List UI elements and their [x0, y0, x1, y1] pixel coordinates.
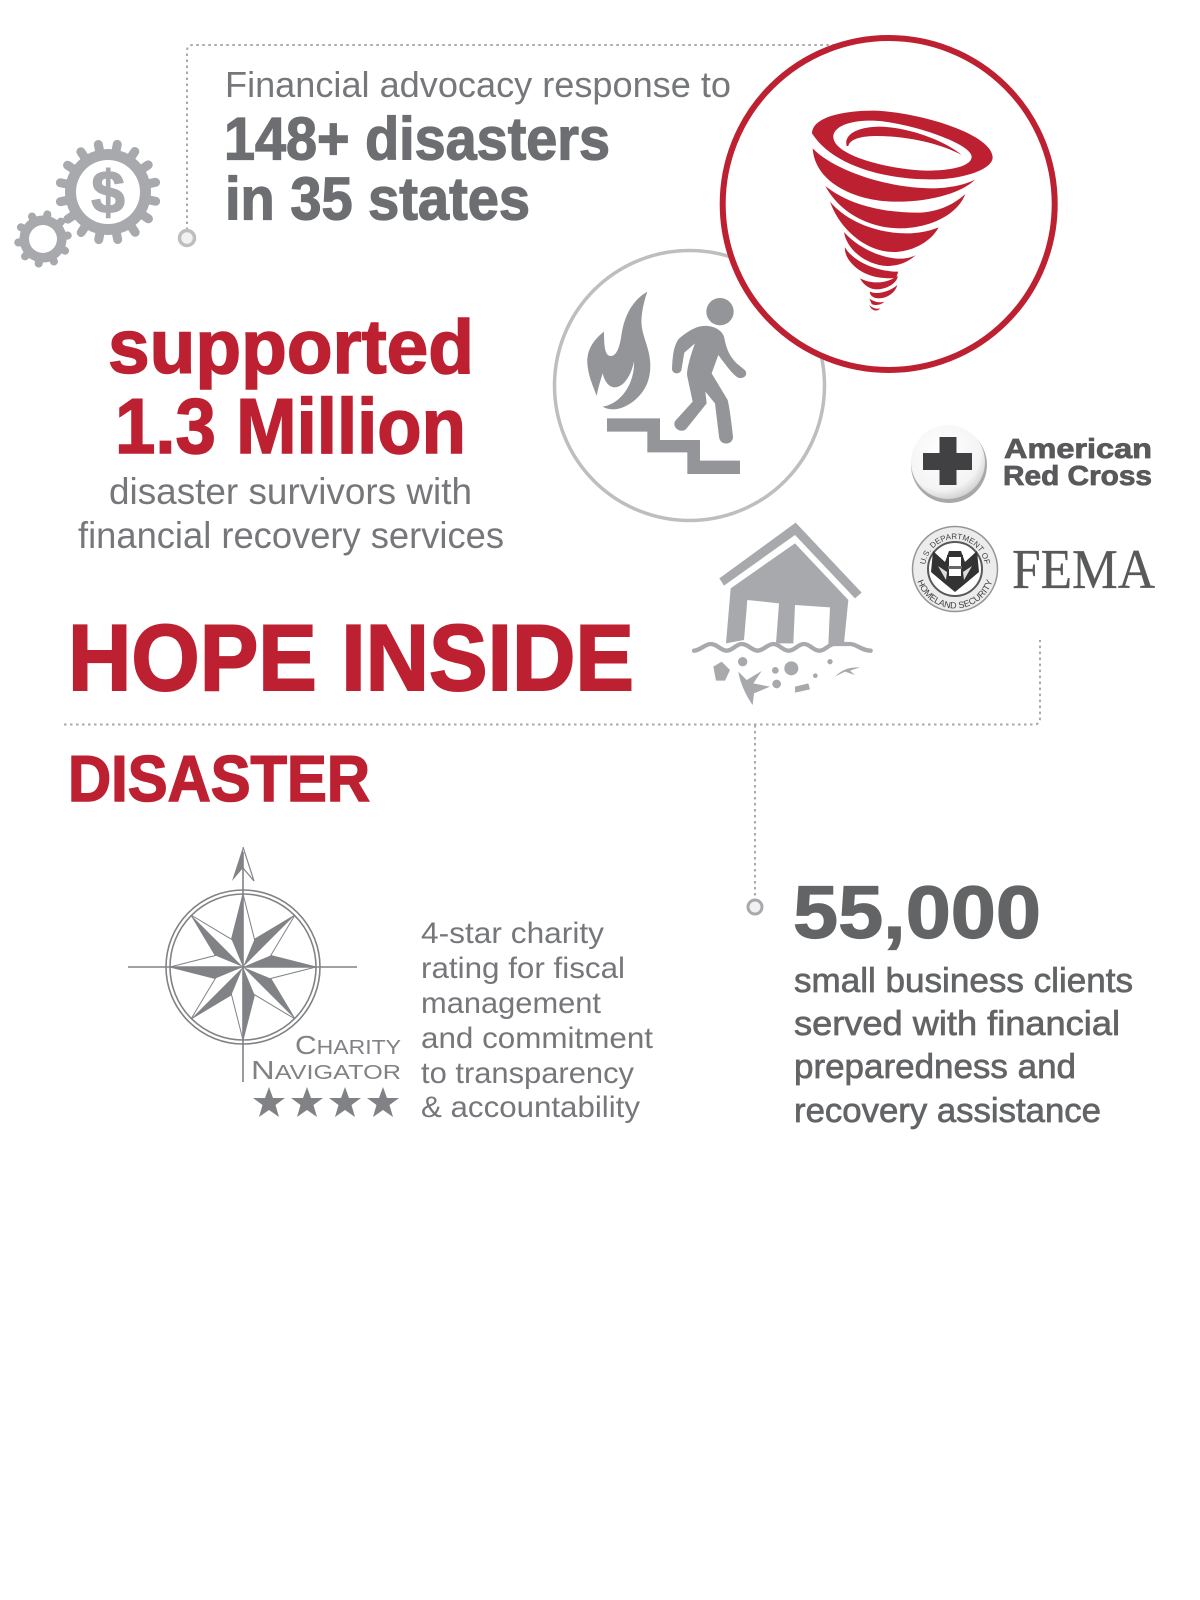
text: disasters stat: in 35 states — [225, 166, 530, 232]
text: charity rating: 4-star charity — [421, 917, 604, 950]
marker: top connector end — [180, 230, 194, 246]
text: small business stat: served with financial — [794, 1005, 1120, 1043]
text: small business stat: recovery assistance — [794, 1092, 1101, 1130]
text: charity rating: to transparency — [421, 1057, 634, 1090]
text: small business stat — [793, 871, 1133, 1130]
logo: FEMA with seal: FEMA — [1012, 539, 1156, 601]
text: survivors stat — [78, 305, 504, 556]
icon: gears with dollar sign — [18, 144, 156, 264]
dotted connector: drop to business stat — [754, 725, 756, 897]
heading: Disaster: DISASTER — [68, 742, 370, 815]
icon: tornado in red circle — [723, 38, 1055, 370]
logo: Charity Navigator compass — [128, 847, 401, 1117]
text: charity rating: & accountability — [421, 1091, 640, 1124]
text: charity rating: and commitment — [421, 1022, 654, 1055]
text: small business stat: 55,000 — [793, 871, 1041, 954]
logo: American Red Cross: American — [1004, 433, 1152, 464]
icon: fire escape in gray circle — [554, 250, 824, 520]
logo: American Red Cross — [911, 425, 1152, 503]
text: survivors stat: 1.3 Million — [115, 382, 466, 470]
text: small business stat: preparedness and — [794, 1048, 1076, 1086]
icon: flooded house — [694, 523, 871, 705]
logo: FEMA with seal: U.S. DEPARTMENT OF — [920, 534, 990, 564]
marker: business stat connector end — [748, 900, 762, 914]
logo: FEMA with seal — [912, 526, 1156, 612]
text: charity rating — [421, 917, 654, 1124]
text: charity rating: management — [421, 987, 602, 1020]
logo: American Red Cross: Red Cross — [1003, 460, 1152, 491]
logo: Charity Navigator compass: CHARITY — [295, 1030, 401, 1060]
text: disasters stat — [224, 64, 731, 232]
text: disasters stat: 148+ disasters — [224, 106, 610, 172]
icon: gears with dollar sign: $ — [91, 159, 125, 226]
text: survivors stat: supported — [108, 305, 474, 390]
logo: FEMA with seal: HOMELAND SECURITY — [918, 579, 992, 608]
text: disasters stat: Financial advocacy response to — [225, 64, 731, 105]
heading: Hope Inside: HOPE INSIDE — [68, 605, 634, 710]
text: survivors stat: disaster survivors with — [109, 471, 472, 512]
text: charity rating: rating for fiscal — [421, 952, 625, 985]
text: survivors stat: financial recovery services — [78, 515, 504, 556]
dotted connector: middle — [64, 640, 1040, 724]
dotted connector: top — [187, 45, 850, 230]
logo: Charity Navigator compass: NAVIGATOR — [251, 1055, 401, 1085]
text: small business stat: small business clients — [794, 962, 1133, 1000]
